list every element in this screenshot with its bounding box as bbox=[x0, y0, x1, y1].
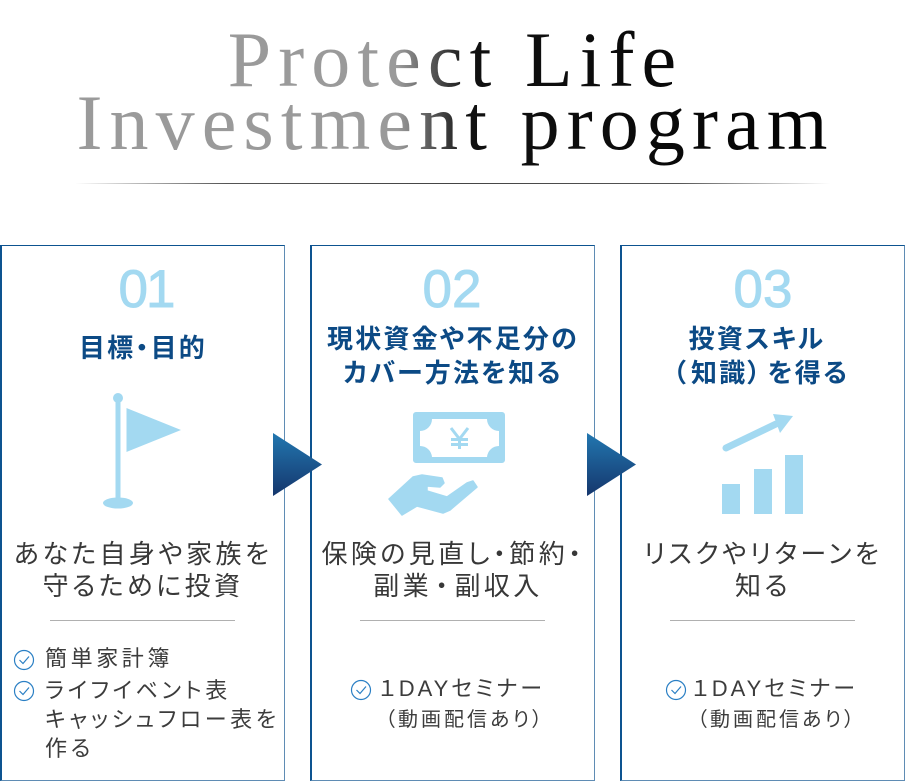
panel: step 01 bbox=[0, 245, 285, 781]
icon: check bbox=[14, 650, 34, 670]
panel: step 02 bbox=[310, 245, 595, 781]
heading: step 02 bbox=[327, 324, 579, 388]
heading: step 02: 現状資金や不足分の bbox=[327, 324, 579, 354]
panel: step 03 bbox=[620, 245, 905, 781]
arrow: step 01 to 02 bbox=[273, 433, 322, 496]
number 03: 03 bbox=[734, 260, 792, 319]
checklist: step 02 bbox=[350, 676, 545, 731]
title: Investment program bbox=[76, 79, 835, 166]
icon: check bbox=[14, 680, 34, 702]
title: Protect Life bbox=[228, 16, 683, 103]
checklist: step 03: （動画配信あり） bbox=[697, 709, 857, 731]
body text: step 02: 保険の見直し・節約・ bbox=[321, 539, 585, 569]
checklist: step 01 bbox=[14, 646, 280, 761]
heading: step 01: 目標・目的 bbox=[79, 333, 207, 363]
number 01: 01 bbox=[119, 260, 173, 319]
body text: step 03: リスクやリターンを bbox=[644, 539, 882, 569]
title bbox=[76, 16, 835, 166]
heading: step 03 bbox=[673, 324, 849, 388]
body text: step 03: 知る bbox=[735, 571, 791, 601]
checklist: step 02: １DAYセミナー bbox=[379, 676, 545, 701]
icon: check bbox=[350, 680, 372, 700]
body text: step 01: 守るために投資 bbox=[43, 571, 243, 601]
body text: step 01: あなた自身や家族を bbox=[14, 539, 272, 569]
icon: check bbox=[666, 680, 686, 700]
checklist: step 01: 簡単家計簿 bbox=[45, 646, 173, 671]
icon: money in hand bbox=[388, 412, 505, 516]
heading: step 02: カバー方法を知る bbox=[343, 358, 563, 388]
heading: step 03: （知識）を得る bbox=[673, 358, 849, 388]
checklist: step 01: 作る bbox=[45, 736, 94, 761]
body text: step 02 bbox=[321, 539, 585, 601]
arrow: step 02 to 03 bbox=[587, 433, 636, 496]
checklist: step 02: （動画配信あり） bbox=[385, 709, 545, 731]
heading: step 03: 投資スキル bbox=[689, 324, 825, 354]
checklist: step 03: １DAYセミナー bbox=[692, 676, 858, 701]
body text: step 03 bbox=[644, 539, 882, 601]
icon: growth chart bbox=[722, 414, 803, 514]
checklist: step 01: ライフイベント表 bbox=[45, 678, 231, 703]
body text: step 01 bbox=[14, 539, 272, 601]
body text: step 02: 副業・副収入 bbox=[373, 571, 543, 601]
number 02: 02 bbox=[423, 260, 481, 319]
checklist: step 03 bbox=[666, 676, 858, 731]
checklist: step 01: キャッシュフロー表を bbox=[45, 707, 280, 732]
icon: flag bbox=[103, 393, 181, 508]
